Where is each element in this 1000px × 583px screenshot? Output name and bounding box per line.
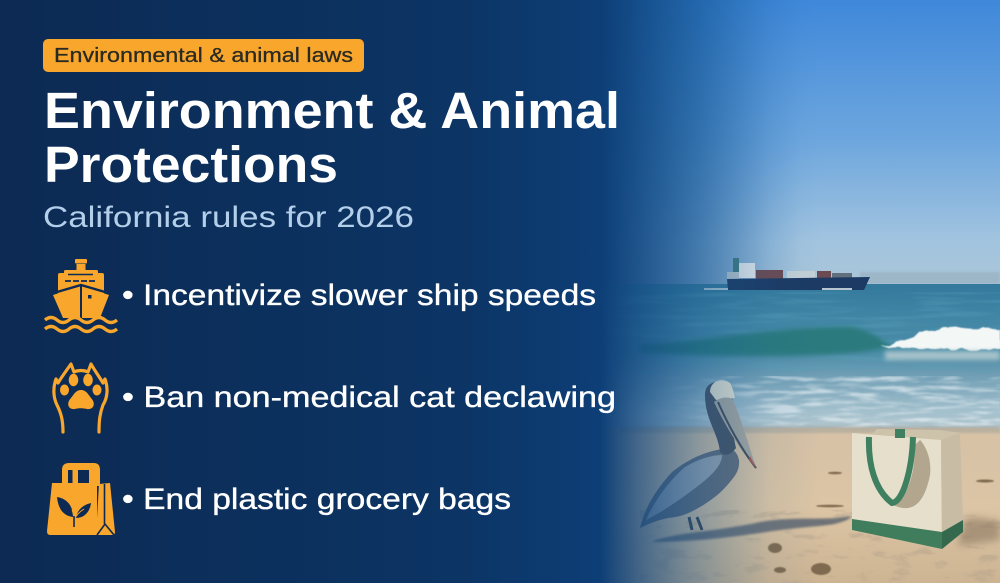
breaking wave: [640, 326, 1000, 360]
subtitle: California rules for 2026: [43, 201, 414, 234]
pelican shadow: [653, 516, 851, 542]
title: Protections: [44, 136, 338, 193]
pelican: [640, 380, 757, 530]
container ship: [704, 258, 870, 290]
bullet: cat declawing: • Ban non-medical cat declawing: [122, 381, 616, 414]
category badge: [43, 39, 364, 72]
sand marks: [640, 510, 1000, 583]
icon: reusable grocery bag: [47, 463, 115, 535]
tote bag: [852, 429, 1000, 549]
category badge: Environmental & animal laws: [54, 44, 353, 67]
title: [44, 82, 620, 193]
title: Environment & Animal: [44, 82, 620, 139]
bullet: plastic bags: • End plastic grocery bags: [122, 483, 511, 516]
icon: cargo ship: [45, 259, 117, 332]
icon: cat paw: [54, 364, 107, 432]
shore foam: [696, 376, 1000, 428]
photo: coastal beach scene: [606, 0, 1000, 583]
bullet: ship speeds: • Incentivize slower ship speeds: [122, 279, 596, 312]
